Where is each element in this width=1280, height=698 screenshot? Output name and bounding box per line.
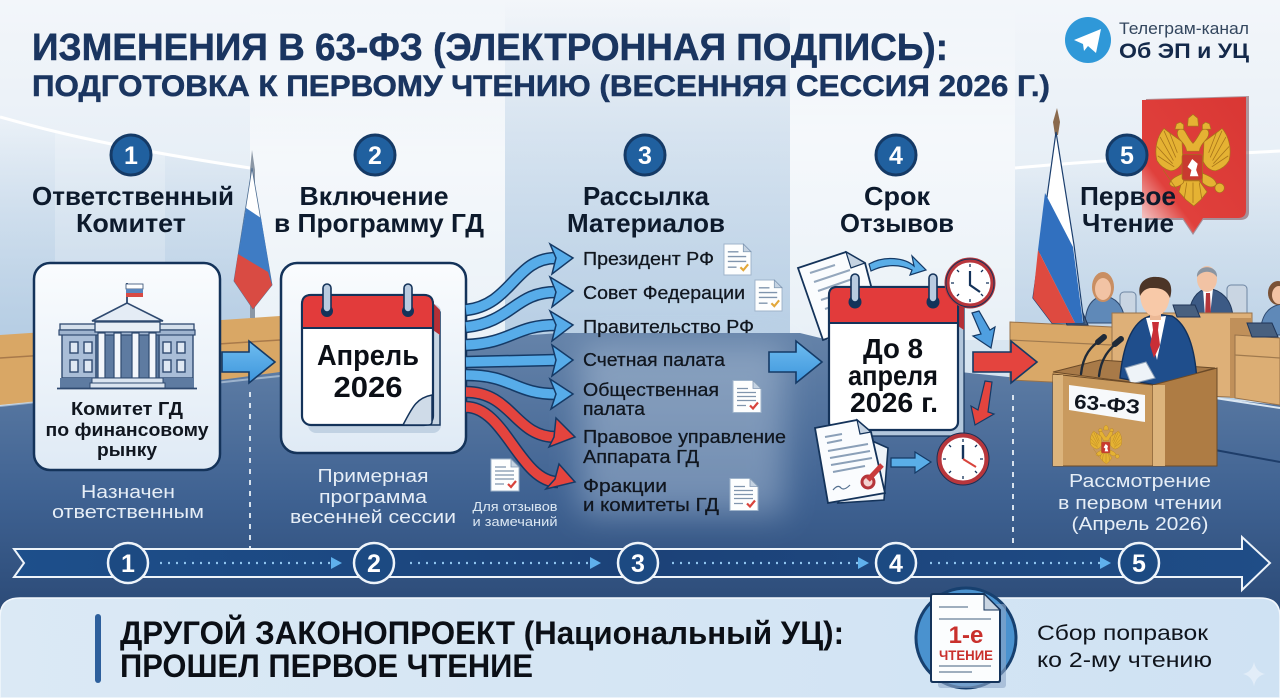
caption: first reading april 2026: в первом чтении bbox=[1058, 493, 1222, 513]
step 1 heading: Ответственный bbox=[32, 181, 234, 211]
step 2 heading: Включение bbox=[300, 181, 448, 211]
caption: assigned bbox=[52, 482, 204, 522]
timeline numbers: 4 bbox=[889, 550, 903, 578]
step 5 scene bbox=[1010, 96, 1280, 534]
caption: spring session programme bbox=[290, 466, 456, 527]
title bbox=[32, 27, 1050, 103]
icon: deadline calendar bbox=[829, 274, 964, 436]
caption: spring session programme: весенней сессии bbox=[290, 507, 456, 527]
icon: first reading document: ЧТЕНИЕ bbox=[939, 648, 993, 663]
caption: assigned: Назначен bbox=[81, 482, 175, 502]
timeline numbers: 3 bbox=[631, 550, 645, 578]
vertical dashed dividers bbox=[250, 392, 1013, 548]
panel heading: ПРОШЕЛ ПЕРВОЕ ЧТЕНИЕ bbox=[120, 648, 533, 684]
podium label 63-ФЗ bbox=[1069, 385, 1145, 422]
timeline nodes bbox=[108, 543, 1159, 583]
caption: for reviews and remarks: Для отзывов bbox=[472, 500, 558, 514]
icon: parliament building bbox=[57, 283, 197, 388]
text: amendments: Сбор поправок bbox=[1037, 622, 1209, 645]
icon: calendar april 2026: 2026 bbox=[334, 372, 402, 404]
recipients list: Общественная bbox=[583, 380, 719, 400]
timeline bbox=[14, 537, 1270, 590]
timeline numbers: 2 bbox=[367, 550, 381, 578]
recipients list: Президент РФ bbox=[583, 249, 714, 269]
committee name: Комитет ГД bbox=[71, 399, 183, 419]
panel heading bbox=[120, 615, 844, 684]
speaker bbox=[1120, 277, 1197, 385]
microphones bbox=[1081, 337, 1121, 376]
telegram channel logo bbox=[1065, 17, 1250, 63]
recipients list: палата bbox=[583, 399, 646, 419]
small russian flag, left bbox=[234, 150, 272, 318]
timeline numbers bbox=[121, 550, 1146, 578]
recipients list: Правительство РФ bbox=[583, 317, 754, 337]
text: amendments: ко 2-му чтению bbox=[1037, 649, 1212, 672]
caption: spring session programme: Примерная bbox=[318, 466, 428, 486]
panel: committee card bbox=[34, 263, 220, 470]
panel: calendar card bbox=[281, 263, 466, 453]
step 4 heading: Срок bbox=[864, 181, 931, 211]
icon: first reading document: 1-е bbox=[949, 622, 983, 649]
panel heading: ДРУГОЙ ЗАКОНОПРОЕКТ (Национальный УЦ): bbox=[120, 615, 844, 651]
document icons bbox=[491, 244, 782, 511]
telegram channel logo: Об ЭП и УЦ bbox=[1119, 40, 1250, 63]
step 3 column bbox=[466, 135, 786, 529]
telegram channel logo: Телеграм-канал bbox=[1119, 19, 1249, 38]
podium bbox=[1053, 368, 1217, 466]
step 4 badge bbox=[876, 135, 916, 175]
large russian flag bbox=[1033, 108, 1084, 323]
step 1 heading: Комитет bbox=[76, 208, 186, 238]
recipients list: Фракции bbox=[583, 476, 667, 496]
recipients list: Правовое управление bbox=[583, 427, 786, 447]
step 3 heading: Материалов bbox=[567, 208, 725, 238]
arrow: step 3 to step 4 bbox=[769, 341, 822, 383]
step 3 badge: 3 bbox=[638, 142, 652, 170]
recipients list bbox=[583, 249, 786, 515]
icon: signed documents bbox=[815, 420, 888, 503]
recipients list: Счетная палата bbox=[583, 350, 726, 370]
podium emblem bbox=[1090, 425, 1122, 464]
step 5 heading bbox=[1080, 181, 1176, 238]
caption: first reading april 2026: (Апрель 2026) bbox=[1072, 514, 1208, 534]
step 5 heading: Первое bbox=[1080, 181, 1176, 211]
step 2 badge: 2 bbox=[368, 142, 382, 170]
icon: upper clock bbox=[946, 259, 994, 307]
timeline dotted arrows bbox=[160, 557, 1111, 569]
committee name: по финансовому bbox=[46, 420, 208, 440]
text: amendments bbox=[1037, 622, 1212, 672]
caption: first reading april 2026: Рассмотрение bbox=[1069, 471, 1211, 491]
arrow: step 4 to step 5 bbox=[973, 341, 1037, 383]
title: ИЗМЕНЕНИЯ В 63-ФЗ (ЭЛЕКТРОННАЯ ПОДПИСЬ): bbox=[32, 27, 948, 69]
icon: first reading document bbox=[916, 588, 1016, 688]
step 4 column bbox=[798, 135, 995, 503]
step 5 heading: Чтение bbox=[1082, 208, 1174, 238]
recipients list: Совет Федерации bbox=[583, 283, 745, 303]
title: ПОДГОТОВКА К ПЕРВОМУ ЧТЕНИЮ (ВЕСЕННЯЯ СЕССИЯ 2026 Г.) bbox=[32, 70, 1050, 103]
step 1 heading bbox=[32, 181, 234, 238]
icon: deadline calendar: До 8 bbox=[863, 333, 923, 364]
arrows fan to recipients bbox=[466, 244, 575, 489]
step 5 badge bbox=[1107, 135, 1147, 175]
recipients list: и комитеты ГД bbox=[583, 495, 719, 515]
icon: calendar april 2026: Апрель bbox=[317, 340, 419, 372]
podium top surface bbox=[1053, 360, 1215, 385]
timeline numbers: 5 bbox=[1132, 550, 1146, 578]
desks bbox=[1010, 305, 1280, 408]
caption: first reading april 2026 bbox=[1058, 471, 1222, 534]
russian coat of arms shield bbox=[1142, 96, 1249, 235]
seated deputies bbox=[1085, 266, 1280, 335]
step 4 heading: Отзывов bbox=[840, 208, 954, 238]
icon: upper document bbox=[798, 252, 880, 340]
step 1 badge: 1 bbox=[124, 142, 138, 170]
icon: lower clock bbox=[937, 433, 989, 485]
timeline numbers: 1 bbox=[121, 550, 135, 578]
committee name: рынку bbox=[97, 440, 157, 460]
decorative sparkle bbox=[1243, 662, 1265, 686]
step 4 heading bbox=[840, 181, 954, 238]
icon: deadline calendar: 2026 г. bbox=[850, 387, 938, 418]
step 3 badge bbox=[625, 135, 665, 175]
step 2 badge bbox=[355, 135, 395, 175]
panel: other bill bbox=[0, 588, 1280, 698]
step 3 heading bbox=[567, 181, 725, 238]
committee name bbox=[46, 399, 208, 460]
step 3 heading: Рассылка bbox=[583, 181, 710, 211]
caption: assigned: ответственным bbox=[52, 502, 204, 522]
arrow: step 1 to step 2 bbox=[222, 341, 275, 383]
small arrows around calendar bbox=[869, 256, 995, 473]
text glow behind recipients bbox=[580, 345, 785, 515]
podium label 63-ФЗ: 63-ФЗ bbox=[1073, 391, 1141, 419]
accent bar bbox=[95, 614, 101, 683]
step 4 badge: 4 bbox=[889, 142, 903, 170]
caption: spring session programme: программа bbox=[319, 487, 428, 507]
step 2 heading bbox=[274, 181, 484, 238]
recipients list: Аппарата ГД bbox=[583, 447, 699, 467]
caption: for reviews and remarks bbox=[472, 500, 558, 529]
caption: for reviews and remarks: и замечаний bbox=[472, 515, 558, 529]
step 1 column bbox=[32, 135, 234, 522]
step 1 badge bbox=[111, 135, 151, 175]
icon: deadline calendar: апреля bbox=[848, 360, 938, 391]
step 5 badge: 5 bbox=[1120, 142, 1134, 170]
step 2 column bbox=[274, 135, 484, 527]
step 2 heading: в Программу ГД bbox=[274, 208, 484, 238]
icon: calendar april 2026 bbox=[302, 284, 441, 433]
